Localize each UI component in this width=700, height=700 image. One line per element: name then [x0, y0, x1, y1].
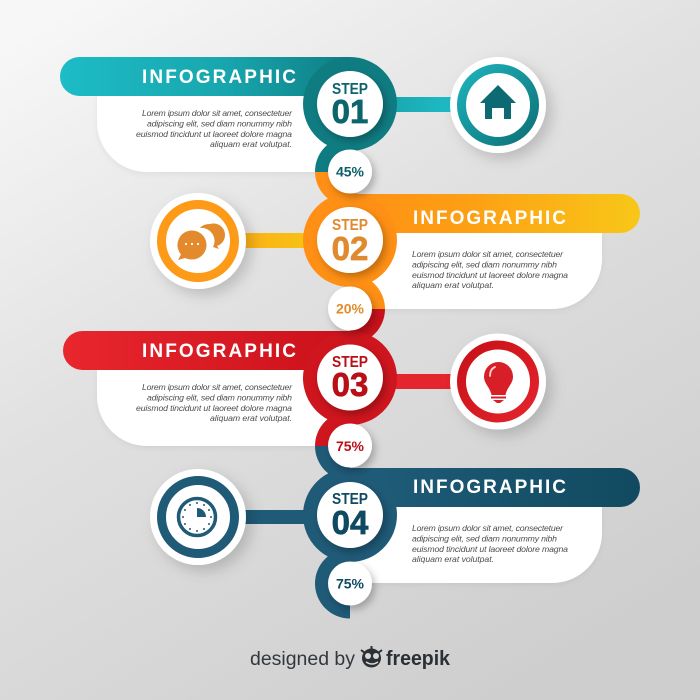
body text 1: adipiscing elit, sed diam nonummy nibh — [147, 118, 292, 128]
percent badge 1: 45% — [336, 164, 365, 180]
step 3 — [63, 286, 546, 481]
heading 4: INFOGRAPHIC — [413, 477, 566, 498]
text panel 1 — [97, 96, 350, 172]
text panel 2 — [350, 233, 602, 309]
body text 1: Lorem ipsum dolor sit amet, consectetuer — [142, 108, 293, 118]
step ring 4 — [303, 468, 397, 562]
body text 3: Lorem ipsum dolor sit amet, consectetuer — [142, 382, 293, 392]
percent badge 4 — [328, 562, 372, 606]
credit: designed by freepik — [250, 646, 451, 670]
percent badge 2 — [328, 286, 372, 330]
icon: freepik mascot — [361, 646, 382, 668]
percent badge 4: 75% — [336, 576, 365, 592]
step 1 — [60, 57, 546, 207]
percent tab ring 3 — [315, 411, 350, 481]
heading 1: INFOGRAPHIC — [142, 67, 296, 88]
body text 1 — [136, 108, 293, 149]
header bar 1 — [60, 57, 350, 96]
step ring 2 — [303, 193, 397, 287]
body text 2: aliquam erat volutpat. — [412, 280, 494, 290]
step badge 4: STEP — [332, 491, 368, 508]
icon badge: home — [450, 57, 546, 153]
credit: designed by freepik: designed by — [250, 648, 355, 670]
step badge 2 — [317, 207, 383, 273]
connector: step 4 to clock icon — [235, 510, 310, 524]
percent tab ring 1 — [315, 136, 350, 207]
percent badge 3 — [328, 424, 372, 468]
body text 2 — [412, 249, 568, 290]
body text 4: euismod tincidunt ut laoreet dolore magna — [412, 544, 568, 554]
step badge 1: STEP — [332, 81, 368, 98]
text panel 3 — [97, 370, 350, 446]
percent tab ring 2 — [350, 274, 385, 344]
connector: step 1 to home icon — [390, 97, 460, 112]
percent badge 1 — [328, 150, 372, 194]
body text 3 — [136, 382, 293, 423]
icon badge: chat — [150, 193, 246, 289]
step badge 1 — [317, 71, 383, 137]
body text 3: adipiscing elit, sed diam nonummy nibh — [147, 392, 292, 402]
body text 4: Lorem ipsum dolor sit amet, consectetuer — [412, 523, 564, 533]
connector: step 2 to chat icon — [235, 233, 310, 248]
step badge 3: STEP — [332, 354, 368, 371]
step badge 3 — [317, 344, 383, 410]
step ring 3 — [303, 331, 397, 425]
heading 3: INFOGRAPHIC — [142, 341, 296, 362]
body text 3: euismod tincidunt ut laoreet dolore magna — [136, 403, 292, 413]
step 4 — [150, 424, 640, 618]
header bar 3 — [63, 331, 350, 370]
body text 4: adipiscing elit, sed diam nonummy nibh — [412, 534, 557, 544]
body text 3: aliquam erat volutpat. — [210, 413, 292, 423]
icon badge: light bulb — [450, 334, 546, 430]
body text 2: Lorem ipsum dolor sit amet, consectetuer — [412, 249, 564, 259]
heading 2: INFOGRAPHIC — [413, 208, 566, 229]
percent badge 3: 75% — [336, 438, 365, 454]
text panel 4 — [350, 507, 602, 583]
step badge 4 — [317, 482, 383, 548]
step badge 4: 04 — [332, 504, 369, 541]
body text 2: euismod tincidunt ut laoreet dolore magna — [412, 270, 568, 280]
percent badge 2: 20% — [336, 300, 365, 316]
icon badge: clock — [150, 469, 246, 565]
connector: step 3 to bulb icon — [390, 374, 460, 389]
body text 1: euismod tincidunt ut laoreet dolore magna — [136, 129, 292, 139]
percent tab ring 4 — [315, 548, 350, 618]
body text 2: adipiscing elit, sed diam nonummy nibh — [412, 260, 557, 270]
step ring 1 — [303, 57, 397, 151]
step badge 3: 03 — [332, 366, 368, 403]
step badge 2: 02 — [332, 230, 368, 267]
step badge 2: STEP — [332, 217, 368, 234]
header bar 2 — [350, 194, 640, 233]
step 2 — [150, 150, 640, 344]
step badge 1: 01 — [332, 93, 368, 130]
header bar 4 — [350, 468, 640, 507]
body text 1: aliquam erat volutpat. — [210, 139, 292, 149]
body text 4 — [412, 523, 568, 564]
body text 4: aliquam erat volutpat. — [412, 554, 494, 564]
credit: designed by freepik: freepik — [386, 647, 451, 670]
